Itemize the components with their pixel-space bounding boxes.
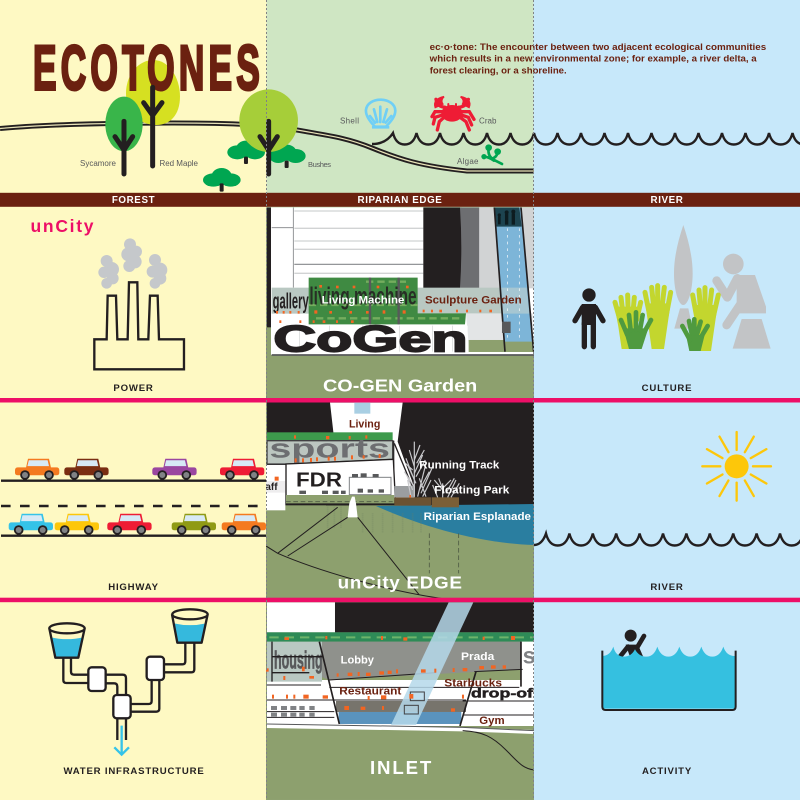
left bucket xyxy=(49,623,85,658)
housing panel xyxy=(267,642,322,682)
wave line: top xyxy=(372,133,800,144)
panel title: unCity EDGE xyxy=(338,572,463,592)
factory outline xyxy=(94,282,184,369)
definition text: forest clearing, or a shoreline. xyxy=(430,66,567,76)
dark green hands xyxy=(621,312,708,351)
tree and bush labels: Bushes xyxy=(308,160,331,169)
tree and bush labels: Sycamore xyxy=(80,159,117,168)
panel title: INLET xyxy=(370,757,432,778)
label: floating park: Floating Park xyxy=(434,484,510,496)
arrow xyxy=(114,726,129,755)
label: cogen: CoGen xyxy=(273,318,468,360)
label: activity: ACTIVITY xyxy=(642,766,692,777)
label: water infrastructure: WATER INFRASTRUCTURE xyxy=(63,766,205,777)
gallery text: gallery xyxy=(273,288,309,313)
tree and bush labels: Shell xyxy=(340,116,359,126)
smoke xyxy=(98,238,167,289)
label: running track: Running Track xyxy=(419,459,500,471)
left edge block xyxy=(266,465,285,510)
lower water band xyxy=(339,712,461,724)
bush: lower xyxy=(203,168,241,192)
definition text xyxy=(429,42,766,76)
hatching xyxy=(328,507,421,533)
site curve xyxy=(463,731,534,770)
cogen strip xyxy=(467,326,468,329)
label: living machine: Living Machine xyxy=(322,295,404,307)
icon: crab xyxy=(432,97,474,130)
fdr band xyxy=(286,459,395,503)
panel: uncity edge xyxy=(265,400,534,600)
parked cars xyxy=(271,706,315,717)
tree and bush labels xyxy=(80,116,497,169)
tree and bush labels: Red Maple xyxy=(160,159,199,168)
black person xyxy=(575,288,603,347)
label: living: Living xyxy=(349,418,380,430)
panel: co-gen garden xyxy=(266,205,534,400)
glass water column xyxy=(494,207,534,352)
water xyxy=(376,504,534,545)
label: lobby: Lobby xyxy=(341,654,375,666)
glass shaft xyxy=(391,602,473,725)
parked cars xyxy=(299,473,384,494)
column background: riparian edge xyxy=(266,0,534,800)
label: gym: Gym xyxy=(479,715,505,727)
green wall xyxy=(309,278,466,324)
orange figures xyxy=(266,636,515,712)
pipes xyxy=(63,642,194,740)
statue xyxy=(348,497,358,517)
translucent band xyxy=(272,288,527,314)
swimmer xyxy=(617,630,644,660)
orange figures xyxy=(294,435,381,462)
highway roads xyxy=(1,481,266,536)
label: drop-of: drop-of xyxy=(471,686,534,701)
tank outline xyxy=(602,651,736,710)
icon: sun xyxy=(702,432,771,501)
sports band xyxy=(267,441,393,464)
label: fdr: FDR xyxy=(296,469,342,492)
label: river: RIVER xyxy=(650,582,684,593)
icon: algae xyxy=(481,144,502,164)
label: power: POWER xyxy=(113,383,154,394)
shaft frames xyxy=(404,692,424,714)
label: restaurant: Restaurant xyxy=(339,685,402,697)
label: culture: CULTURE xyxy=(642,383,692,394)
living machine backing text: living machine xyxy=(309,283,417,310)
tree crown: sycamore xyxy=(105,97,143,151)
icon: swimmer in tank xyxy=(602,630,736,710)
structural diagonals xyxy=(319,642,521,726)
white floors xyxy=(267,680,534,726)
label: sculpture garden: Sculpture Garden xyxy=(425,295,522,307)
icon: water infrastructure xyxy=(49,609,208,755)
tree crown: red maple xyxy=(126,60,180,125)
header bar xyxy=(0,193,800,207)
title: ECOTONES xyxy=(33,33,260,103)
definition text: ec·o·tone: The encounter between two adjacent ecological communities xyxy=(430,42,766,53)
dark tower xyxy=(423,207,462,288)
panel title: CO-GEN Garden xyxy=(323,375,477,395)
panel: inlet: housing xyxy=(274,646,323,674)
icon: shell xyxy=(366,100,395,127)
bush: left of the riparian tree xyxy=(227,141,265,164)
icon: power plant xyxy=(94,238,184,369)
tree and bush labels: Algae xyxy=(457,157,479,166)
label: uncity: unCity xyxy=(30,216,94,236)
label: aff: aff xyxy=(265,482,278,493)
column background: forest xyxy=(0,0,266,800)
label: highway: HIGHWAY xyxy=(108,582,159,593)
wave line: river xyxy=(534,534,800,546)
gray leaf sculpture xyxy=(674,225,693,329)
site lines xyxy=(266,502,459,599)
header: river: RIVER xyxy=(651,195,683,206)
label: prada: Prada xyxy=(461,651,495,663)
definition text: which results in a new environmental zone; for example, a river delta, a xyxy=(429,54,757,64)
planter xyxy=(394,486,459,507)
icon: culture figures xyxy=(575,225,771,351)
label: riparian esplanade: Riparian Esplanade xyxy=(424,511,531,523)
gray seated figure xyxy=(717,254,771,349)
label: sports: sports xyxy=(269,433,390,463)
ground line with road xyxy=(0,123,534,171)
cars: upper lane xyxy=(15,459,264,480)
bush: right of the riparian tree xyxy=(269,145,306,168)
park trees xyxy=(404,442,459,497)
light green hands xyxy=(615,286,718,351)
tree and bush labels: Crab xyxy=(479,116,497,126)
trees and bushes xyxy=(105,87,306,192)
header: forest: FOREST xyxy=(112,195,155,206)
label: right edge s: s xyxy=(523,642,536,668)
column background: river xyxy=(534,0,800,800)
water xyxy=(602,647,736,709)
panel divider lines xyxy=(0,398,800,602)
gray stone band xyxy=(321,642,521,680)
lower concrete band xyxy=(336,701,466,712)
connector boxes xyxy=(88,657,164,718)
tree trunks xyxy=(115,87,277,174)
cars: lower lane xyxy=(9,514,266,535)
panel: inlet xyxy=(266,600,536,800)
green strip xyxy=(267,432,393,441)
right bucket xyxy=(172,609,208,643)
header: riparian edge: RIPARIAN EDGE xyxy=(358,195,442,206)
label: starbucks: Starbucks xyxy=(444,677,502,689)
white tower xyxy=(330,403,414,500)
floor lines xyxy=(267,669,534,717)
orange figures xyxy=(276,285,492,323)
green strip xyxy=(267,632,534,642)
tree crown: riparian xyxy=(239,89,298,152)
